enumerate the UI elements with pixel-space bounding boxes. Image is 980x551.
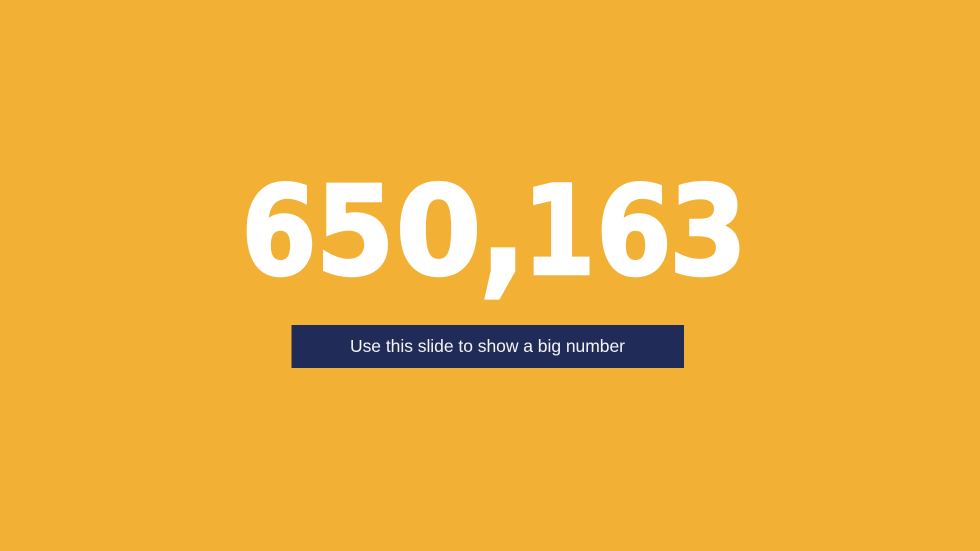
big number: 6 bbox=[596, 159, 672, 304]
big number bbox=[241, 138, 747, 313]
big number: 6 bbox=[241, 159, 317, 304]
big number: , bbox=[479, 138, 527, 313]
caption bar bbox=[292, 325, 684, 368]
big number: 3 bbox=[669, 159, 747, 303]
big number: 1 bbox=[522, 160, 596, 304]
big number: 0 bbox=[395, 160, 482, 304]
big number: 5 bbox=[315, 160, 395, 304]
caption text: Use this slide to show a big number bbox=[350, 336, 625, 356]
